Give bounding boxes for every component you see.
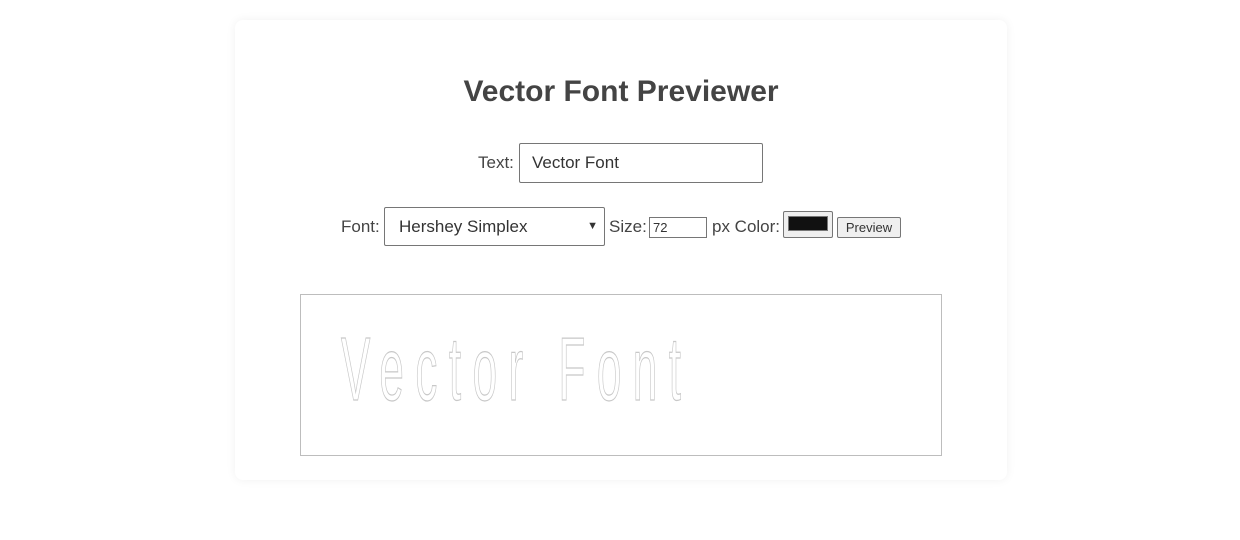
label: Text: Text: <box>478 153 514 172</box>
label: px Color: px Color: <box>712 217 780 236</box>
canvas preview box <box>300 294 942 456</box>
text field row <box>478 143 763 183</box>
select: font: Hershey Simplex <box>399 217 528 236</box>
controls row <box>341 207 901 246</box>
input: text: Vector Font <box>532 153 619 172</box>
select: font: ▼ <box>587 220 598 232</box>
input: text <box>519 143 763 183</box>
select: font <box>384 207 605 246</box>
button: preview: Preview <box>846 220 892 235</box>
input: size <box>649 217 707 238</box>
color swatch <box>783 211 833 238</box>
rendered preview text: Vector Font <box>341 320 681 420</box>
panel: card <box>235 20 1007 480</box>
button: preview <box>837 217 901 238</box>
label: Font: Font: <box>341 217 380 236</box>
title: Vector Font Previewer <box>463 75 779 108</box>
label: Size: Size: <box>609 217 647 236</box>
input: size: 72 <box>653 220 667 235</box>
